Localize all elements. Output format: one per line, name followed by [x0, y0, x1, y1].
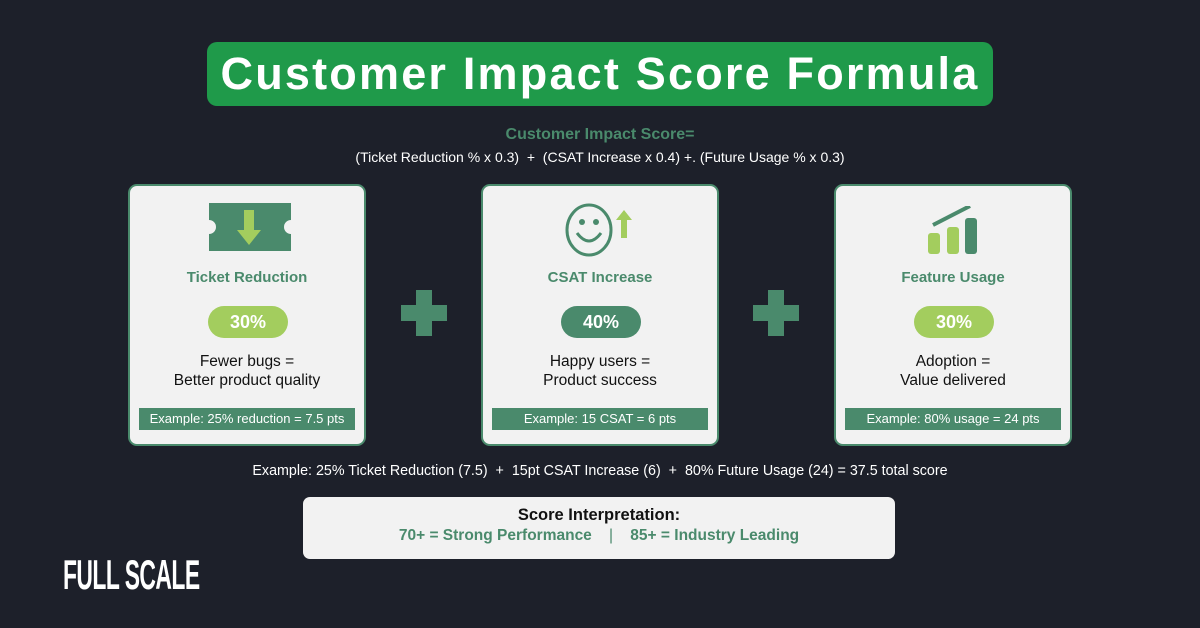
heading: CSAT Increase — [548, 269, 652, 286]
example total text: Example: 25% Ticket Reduction (7.5) + 15pt CSAT Increase (6) + 80% Future Usage (24) = 37.5 total score — [252, 463, 948, 479]
description — [174, 353, 320, 389]
example — [139, 408, 355, 430]
weight pill: 30% — [230, 312, 266, 332]
logo: FULL SCALE — [63, 551, 200, 598]
icon: plus — [753, 290, 799, 336]
score interpretation box — [303, 497, 895, 559]
example — [492, 408, 708, 430]
box values: 70+ = Strong Performance | 85+ = Industry Leading — [399, 527, 799, 544]
formula text: (Ticket Reduction % x 0.3) + (CSAT Increase x 0.4) +. (Future Usage % x 0.3) — [355, 149, 845, 165]
weight pill — [561, 306, 641, 338]
description — [900, 353, 1006, 389]
weight pill — [208, 306, 288, 338]
description: Adoption = — [916, 353, 990, 370]
description: Product success — [543, 372, 657, 389]
description: Value delivered — [900, 372, 1006, 389]
icon: ticket down — [209, 203, 291, 251]
panel: ticket reduction — [128, 184, 366, 446]
icon: plus — [401, 290, 447, 336]
example: Example: 25% reduction = 7.5 pts — [150, 411, 344, 426]
heading: Feature Usage — [901, 269, 1005, 286]
heading: Ticket Reduction — [187, 269, 307, 286]
icon: bar chart — [928, 206, 977, 254]
weight pill: 40% — [583, 312, 619, 332]
example — [845, 408, 1061, 430]
icon: smiley up — [566, 204, 632, 256]
weight pill: 30% — [936, 312, 972, 332]
description: Happy users = — [550, 353, 650, 370]
example: Example: 15 CSAT = 6 pts — [524, 411, 676, 426]
example: Example: 80% usage = 24 pts — [866, 411, 1040, 426]
weight pill — [914, 306, 994, 338]
description: Better product quality — [174, 372, 320, 389]
panel: csat increase — [481, 184, 719, 446]
description: Fewer bugs = — [200, 353, 294, 370]
panel: feature usage — [834, 184, 1072, 446]
title: Customer Impact Score Formula — [220, 48, 979, 99]
formula heading: Customer Impact Score= — [506, 126, 694, 143]
description — [543, 353, 657, 389]
box heading: Score Interpretation: — [518, 506, 680, 524]
